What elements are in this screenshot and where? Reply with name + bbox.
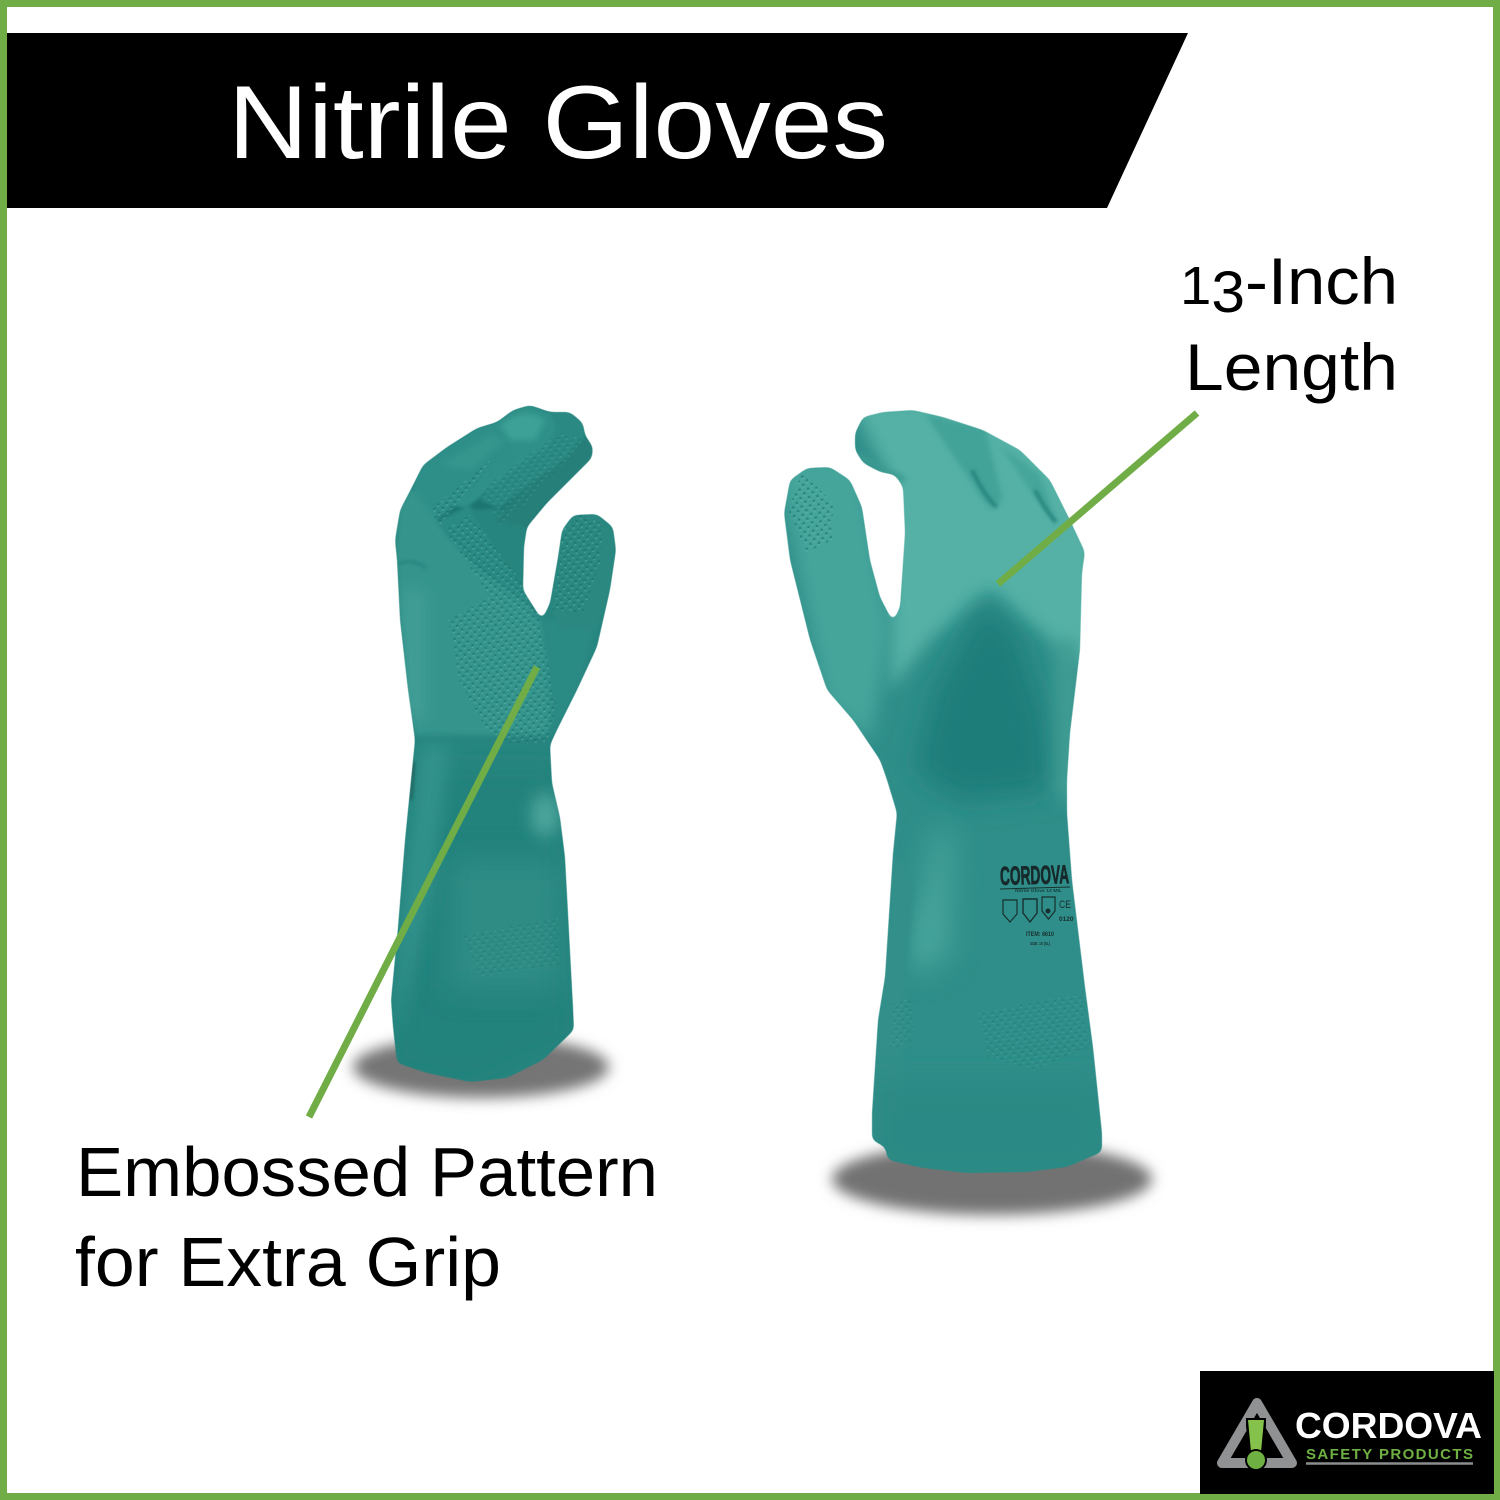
cuff lower shading [878, 1094, 899, 1138]
cuff highlight [531, 793, 559, 837]
logo wordmark: CORDOVA [1295, 1405, 1482, 1446]
right glove, back side [784, 410, 1102, 1174]
callout text: 13-inch length [1180, 244, 1398, 404]
glove print: brand mark and certification [1000, 859, 1074, 946]
left glove, palm side [390, 406, 616, 1082]
finger backdrop [438, 498, 510, 520]
crease at side [398, 562, 426, 568]
callout line: embossed pattern [309, 667, 537, 1117]
lower finger strip A [440, 506, 530, 606]
finger crease 2 [1035, 490, 1056, 522]
thumb body [784, 467, 886, 734]
icon: warning triangle [1222, 1403, 1292, 1471]
embossed thumb [788, 472, 833, 552]
callout text: 13-inch length: 3 [1211, 260, 1245, 325]
thumb [552, 514, 616, 630]
shield icon 1 [1003, 900, 1017, 922]
notified body number: 0120 [1059, 916, 1074, 923]
lower finger strip B [475, 508, 526, 584]
embossed cuff [463, 918, 560, 977]
wrist and cuff body [385, 770, 575, 1090]
light hand upper area [858, 410, 1084, 684]
palm [396, 487, 557, 735]
palm left highlight [404, 590, 424, 720]
cuff light band [910, 838, 956, 970]
embossed finger band [445, 515, 540, 622]
shield glyph [1046, 908, 1050, 914]
cuff left side fold [906, 930, 908, 949]
front finger [413, 423, 496, 518]
embossed palm [448, 597, 557, 743]
side dark streak [411, 762, 414, 800]
embossed cuff [978, 993, 1090, 1070]
print rule [1000, 887, 1070, 889]
item number: ITEM: 6610 [1026, 932, 1055, 938]
title banner [7, 33, 1188, 208]
callout text: embossed pattern [75, 1133, 658, 1301]
third finger [482, 435, 578, 508]
embossed thumb [553, 515, 603, 613]
logo tagline: SAFETY PRODUCTS [1306, 1446, 1473, 1463]
glove shadow: left [353, 1036, 609, 1098]
small print: Nitrile Glove 13 MIL [1015, 888, 1062, 893]
finger tops [925, 414, 1003, 510]
finger top highlights [500, 414, 545, 440]
callout text: 13-inch length: Length [1185, 330, 1398, 404]
callout text: embossed pattern: for Extra Grip [75, 1223, 501, 1301]
finger crease 1 [972, 470, 997, 507]
size: SIZE: 10 (XL) [1030, 941, 1050, 946]
callout text: embossed pattern: Embossed Pattern [76, 1133, 658, 1211]
index finger crease near thumb [887, 470, 906, 482]
CE mark: CE [1059, 899, 1071, 911]
back-of-hand dark shading [915, 600, 1050, 800]
callout line: 13-inch length [998, 413, 1197, 584]
embossed fingers [433, 461, 492, 524]
cuff central lighter band [455, 865, 560, 985]
title: Nitrile Gloves [228, 65, 888, 181]
callout text: 13-inch length: -Inch [1245, 244, 1398, 318]
cuff left lighter band [398, 746, 448, 990]
forearm right lighter edge [1056, 640, 1078, 800]
embossed cuff side [892, 1000, 912, 1046]
shield icon 3 [1042, 897, 1055, 919]
brand logo [1200, 1371, 1494, 1494]
thumb base [548, 677, 554, 706]
shield icon 2 [1023, 899, 1037, 922]
glove brand name: CORDOVA [1000, 859, 1069, 891]
glove shadow: right [832, 1143, 1152, 1215]
fourth finger [506, 445, 590, 525]
callout text: 13-inch length: 1 [1180, 256, 1211, 316]
second finger [454, 406, 548, 508]
